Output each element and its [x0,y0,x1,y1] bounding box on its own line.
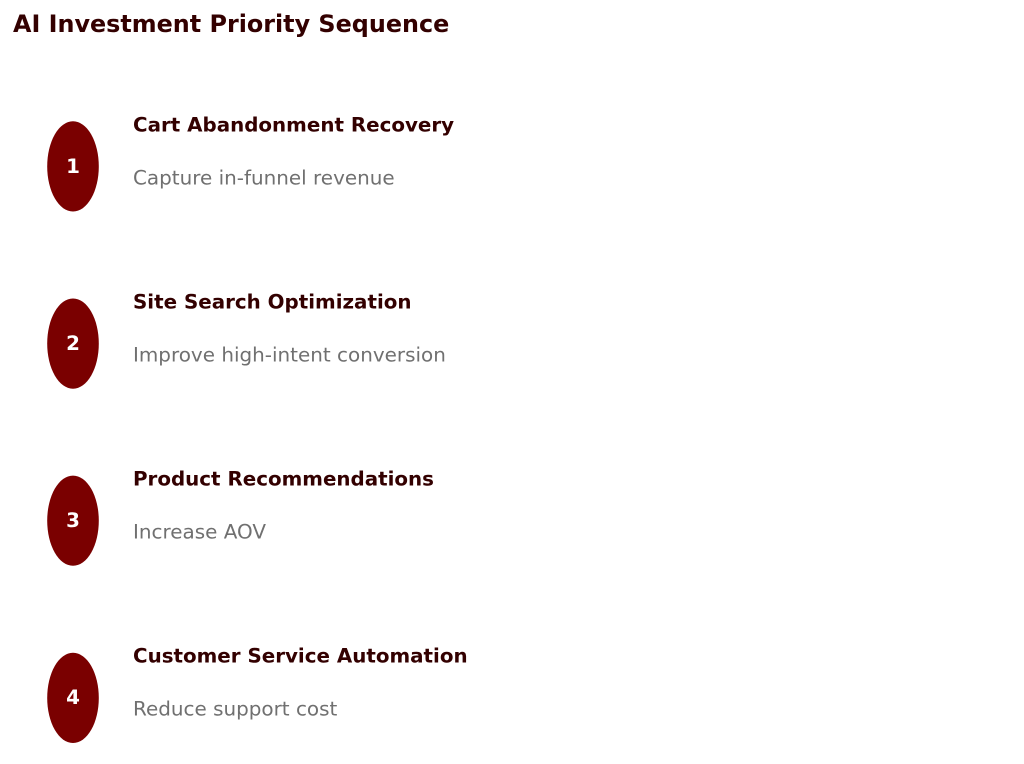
step 1: cart abandonment recovery [47,114,454,212]
step 3 heading: Product Recommendations [133,468,434,490]
step 3 description: Increase AOV [133,520,266,544]
badge 2 [47,298,99,389]
step 3: product recommendations [47,468,434,566]
badge 3 [47,476,99,566]
badge 2: 2 [66,332,80,355]
step 4 heading: Customer Service Automation [133,644,468,668]
step 4: customer service automation [47,644,468,743]
step 2: site search optimization [47,290,446,389]
step 1 heading: Cart Abandonment Recovery [133,114,454,136]
step 4 description: Reduce support cost [133,696,338,720]
step 2 description: Improve high-intent conversion [133,342,446,366]
badge 4: 4 [66,686,80,709]
badge 1: 1 [66,155,80,178]
badge 4 [47,653,99,743]
badge 3: 3 [66,509,80,532]
step 1 description: Capture in-funnel revenue [133,166,395,190]
title: AI Investment Priority Sequence [13,10,449,38]
step 2 heading: Site Search Optimization [133,290,412,314]
badge 1 [47,121,99,212]
